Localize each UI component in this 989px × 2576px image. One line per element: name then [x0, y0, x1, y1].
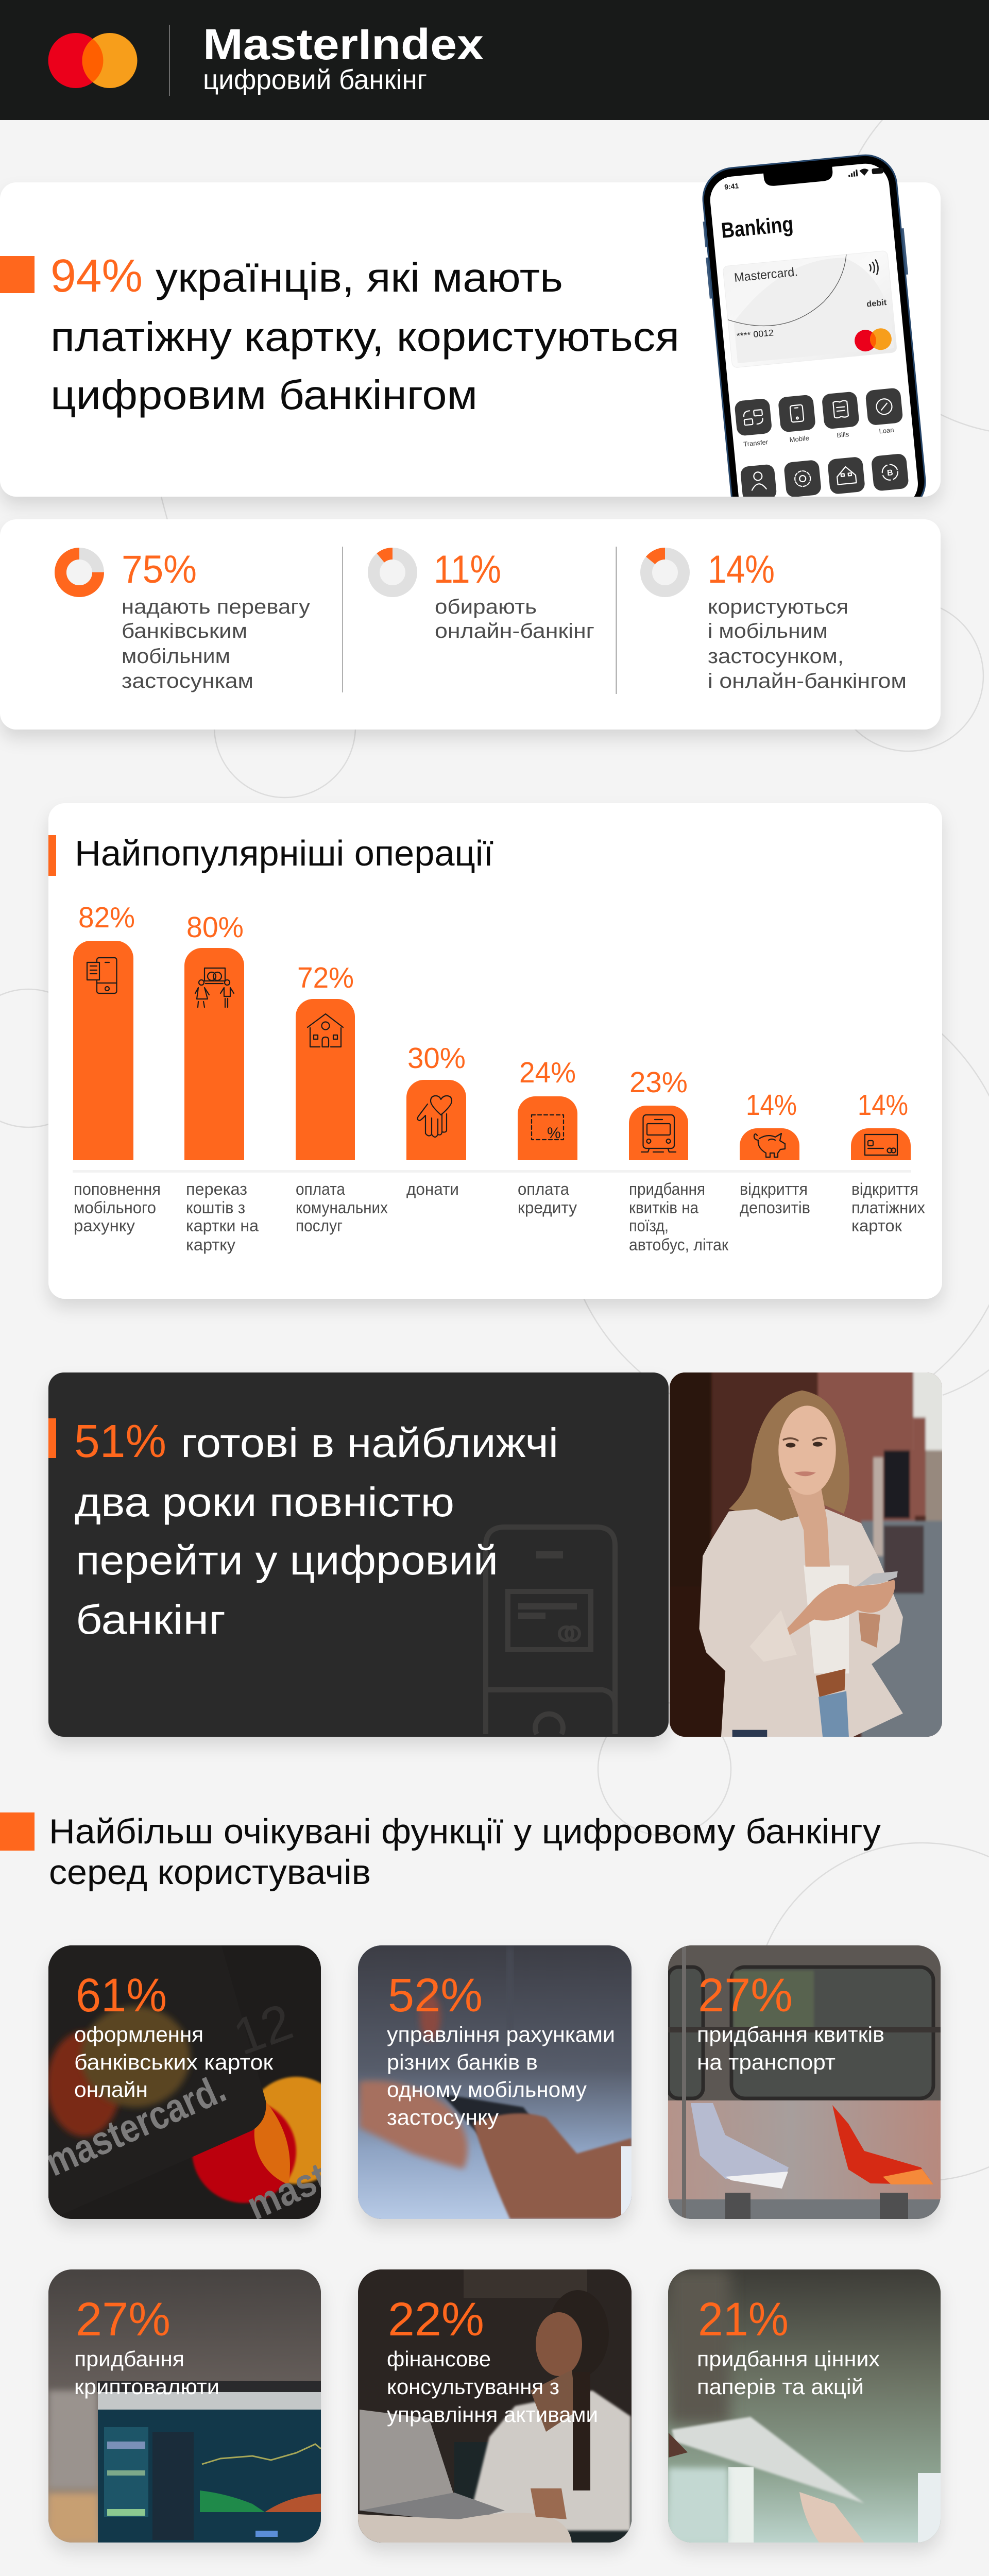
bar: поповнення мобільного рахунку 82%: 82%: [78, 901, 135, 934]
axis line: [73, 1170, 911, 1173]
stat: 11%: 11%: [434, 548, 501, 591]
heading: Найпопулярніші операції: [75, 833, 493, 873]
card text: оформлення: [74, 2022, 203, 2046]
app icons row 2: [741, 454, 909, 497]
card text: паперів та акцій: [697, 2375, 864, 2399]
bar: придбання квитків 23%: 23%: [629, 1066, 688, 1099]
bank card: **** 0012: [736, 328, 774, 341]
stat: 11%: обирають: [435, 596, 537, 618]
bar: оплата кредиту 24%: оплата: [518, 1180, 569, 1198]
photo: black Mastercard card: [48, 1945, 321, 2219]
bank card: Mastercard.: [734, 265, 798, 285]
panel: 94% headline: [0, 182, 941, 497]
panel: most popular operations: [48, 803, 942, 1299]
card text: [74, 1969, 274, 2102]
header bar: [0, 0, 989, 120]
photo: bus seats: [668, 1945, 941, 2219]
stat: 14%: і онлайн-банкінгом: [708, 670, 907, 692]
card: 27% криптовалюти: [48, 2269, 321, 2543]
photo: black Mastercard card: mast: [240, 2154, 334, 2229]
stat: 75%: 75%: [122, 548, 197, 591]
app icons row 1: [735, 388, 902, 436]
panel: digital banking preferences: [0, 519, 941, 730]
card text: придбання: [74, 2347, 184, 2371]
bar: відкриття депозитів 14%: [740, 1089, 810, 1217]
bar: придбання квитків 23%: придбання: [629, 1180, 705, 1198]
card: 21% цінні папери: [668, 2269, 941, 2543]
bar: переказ коштів з картки на картку 80%: [184, 911, 259, 1254]
card text: придбання цінних: [697, 2347, 880, 2371]
bar: переказ коштів з картки на картку 80%: коштів з: [186, 1198, 245, 1217]
bar: відкриття депозитів 14%: депозитів: [740, 1198, 810, 1217]
bar: придбання квитків 23%: квитків на: [629, 1198, 698, 1217]
header subtitle: цифровий банкінг: [203, 64, 427, 95]
app labels: [743, 429, 894, 446]
card text: 22%: [388, 2293, 484, 2346]
card text: управління активами: [387, 2402, 598, 2427]
photo: paper in hand: [668, 2269, 941, 2543]
photo: black Mastercard card: mastercard.: [39, 2065, 232, 2185]
card text: [697, 1969, 884, 2074]
bar: оплата комунальних послуг 72%: [296, 961, 388, 1235]
stat: 75%: надають перевагу: [122, 596, 310, 618]
card text: 21%: [698, 2293, 789, 2346]
callout text: два роки повністю: [75, 1479, 454, 1525]
stat: 75%: банківським: [122, 620, 247, 642]
card text: криптовалюти: [74, 2375, 219, 2399]
app icons row 2: B: [886, 468, 893, 478]
card text: [697, 2293, 880, 2399]
panel: 51% callout: [48, 1372, 669, 1737]
card text: 52%: [388, 1969, 483, 2022]
callout text: готові в найближчі: [181, 1420, 558, 1466]
headline text: цифровим банкінгом: [50, 372, 478, 418]
photo: black Mastercard card: 12: [226, 1992, 300, 2066]
bar: переказ коштів з картки на картку 80%: 80%: [186, 911, 244, 944]
card text: різних банків в: [387, 2050, 538, 2074]
bar: поповнення мобільного рахунку 82%: [73, 901, 161, 1235]
photo: hands holding phone: [358, 1945, 632, 2219]
app labels: Loan: [879, 426, 894, 435]
headline text: платіжну картку, користуються: [50, 314, 679, 360]
bar: переказ коштів з картки на картку 80%: картку: [186, 1235, 235, 1254]
bar: поповнення мобільного рахунку 82%: поповнення: [74, 1180, 161, 1198]
card text: на транспорт: [697, 2050, 835, 2074]
accent square: [0, 256, 35, 293]
bar: поповнення мобільного рахунку 82%: рахунку: [74, 1216, 135, 1235]
bar: оплата комунальних послуг 72%: 72%: [297, 961, 354, 994]
bar: переказ коштів з картки на картку 80%: переказ: [186, 1180, 247, 1198]
bar: оплата комунальних послуг 72%: оплата: [296, 1180, 345, 1198]
card text: управління рахунками: [387, 2022, 615, 2046]
card text: 61%: [76, 1969, 167, 2022]
bar: донати 30%: донати: [406, 1180, 459, 1198]
stat: 75%: застосункам: [122, 670, 253, 692]
bar: відкриття платіжних карток 14%: [851, 1089, 925, 1235]
photo: woman with smartphone: [670, 1372, 942, 1737]
callout text: 51%: [74, 1416, 166, 1467]
card text: [387, 2293, 598, 2427]
bar: відкриття депозитів 14%: відкриття: [740, 1180, 808, 1198]
card text: консультування з: [387, 2375, 559, 2399]
bar: донати 30%: [406, 1042, 466, 1198]
headline text: 94%: [50, 250, 143, 302]
stat: 11%: онлайн-банкінг: [435, 620, 594, 642]
heading: most expected functions: Найбільш очікувані функції у цифровому банкінгу: [49, 1812, 881, 1851]
card text: банківських карток: [74, 2050, 274, 2074]
card text: онлайн: [74, 2077, 148, 2102]
card text: 27%: [698, 1969, 793, 2022]
card: 61% онлайн-оформлення карток: [39, 1945, 348, 2229]
card: 52% управління рахунками: [358, 1945, 632, 2219]
app labels: Mobile: [789, 434, 810, 444]
bar: придбання квитків 23%: поїзд,: [629, 1216, 669, 1235]
stat: 75%: [55, 548, 310, 692]
bar: поповнення мобільного рахунку 82%: мобільного: [74, 1198, 156, 1217]
card text: [74, 2293, 219, 2399]
bar: відкриття платіжних карток 14%: карток: [851, 1216, 902, 1235]
card text: застосунку: [387, 2105, 499, 2129]
bar: оплата кредиту 24%: 24%: [519, 1056, 576, 1089]
card text: [387, 1969, 615, 2129]
stat: 14%: застосунком,: [708, 645, 844, 668]
card text: 27%: [76, 2293, 170, 2346]
app title: Banking: [720, 212, 794, 243]
bar: оплата комунальних послуг 72%: послуг: [296, 1216, 343, 1235]
heading: most expected functions: [0, 1812, 881, 1892]
bar: придбання квитків 23%: автобус, літак: [629, 1235, 729, 1254]
icon: ghost phone with card: [486, 1527, 615, 1734]
headline text: [50, 250, 679, 418]
card text: фінансове: [387, 2347, 491, 2371]
bar: оплата комунальних послуг 72%: комунальних: [296, 1198, 388, 1217]
bar: оплата кредиту 24%: [518, 1056, 577, 1217]
status bar: 9:41: [724, 181, 739, 191]
callout text: банкінг: [76, 1597, 226, 1642]
stat: 14%: [640, 548, 907, 692]
bar: придбання квитків 23%: [629, 1066, 729, 1254]
header title: MasterIndex: [203, 20, 484, 69]
stat: 75%: мобільним: [122, 645, 230, 668]
logo: Mastercard: [48, 33, 137, 88]
photo: woman at laptop: [358, 2269, 632, 2543]
bar: відкриття депозитів 14%: 14%: [746, 1089, 797, 1122]
bank card: debit: [866, 298, 888, 309]
bar: відкриття платіжних карток 14%: відкриття: [851, 1180, 918, 1198]
bar: відкриття платіжних карток 14%: 14%: [858, 1089, 908, 1122]
callout text: перейти у цифровий: [76, 1537, 498, 1583]
stat: 14%: і мобільним: [708, 620, 828, 642]
stat: 14%: 14%: [708, 548, 775, 591]
bar: донати 30%: 30%: [407, 1042, 466, 1075]
stat: 14%: користуються: [708, 596, 848, 618]
bar: оплата кредиту 24%: %: [547, 1125, 561, 1142]
bar: відкриття платіжних карток 14%: платіжних: [851, 1198, 925, 1217]
bar: оплата кредиту 24%: кредиту: [518, 1198, 577, 1217]
heading: most expected functions: серед користувачів: [49, 1853, 371, 1892]
card: 27% квитки на транспорт: [668, 1945, 941, 2219]
photo: laptop with trading chart: [48, 2269, 321, 2543]
stat: 11%: [368, 548, 594, 642]
phone illustration: [703, 155, 926, 497]
callout text: [74, 1416, 558, 1642]
headline text: українців, які мають: [156, 255, 563, 300]
card: 22% фінансове консультування: [358, 2269, 632, 2543]
accent bar: [48, 1418, 56, 1458]
bank card: [723, 250, 897, 368]
app labels: Bills: [837, 430, 849, 439]
card text: придбання квитків: [697, 2022, 884, 2046]
bar: переказ коштів з картки на картку 80%: картки на: [186, 1216, 259, 1235]
app labels: Transfer: [743, 438, 769, 448]
accent bar: [48, 835, 56, 876]
card text: одному мобільному: [387, 2077, 587, 2102]
notch: [763, 167, 832, 186]
